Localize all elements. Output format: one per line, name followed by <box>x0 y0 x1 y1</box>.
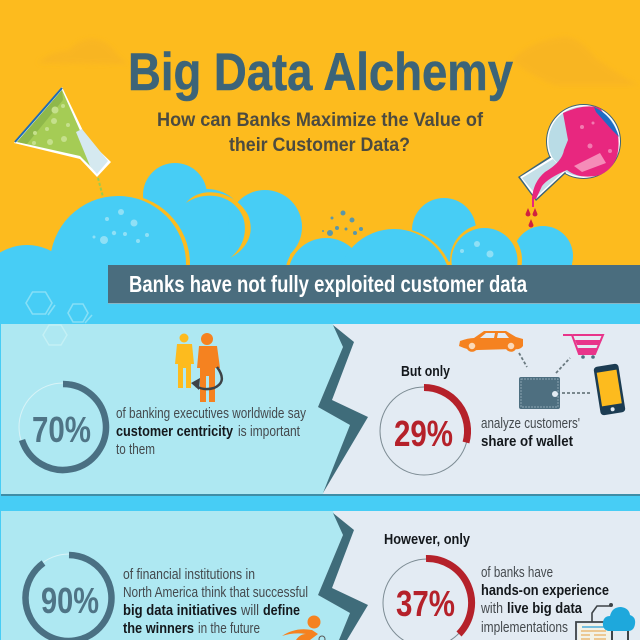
banner <box>108 265 640 304</box>
text: 37% description <box>480 564 609 636</box>
subtitle: How can Banks Maximize the Value of <box>157 110 484 131</box>
text: 90% description <box>123 566 308 637</box>
icon: pink flask <box>518 104 621 228</box>
bubbles on clouds <box>92 209 494 258</box>
ring: 70% <box>19 383 107 471</box>
ring: 29% <box>380 387 468 475</box>
panel: row 1 <box>1 324 640 496</box>
heading: but only: But only <box>401 364 450 380</box>
text: 90% description: define <box>263 603 300 619</box>
text: 70% description: is important <box>238 423 301 440</box>
text: 90% description: will <box>240 602 259 619</box>
ring: 37%: 37% <box>396 583 455 624</box>
text: 90% description: of financial institutions in <box>123 566 255 583</box>
icon: cloud and server <box>576 603 635 640</box>
zigzag divider <box>318 325 368 493</box>
icon: runner <box>282 616 325 640</box>
text: 37% description: with <box>480 600 503 617</box>
text: 70% description: to them <box>116 441 155 458</box>
icon: green flask <box>14 87 111 197</box>
text: 37% description: implementations <box>481 619 568 636</box>
icon: two people <box>175 333 222 402</box>
panel: row 2 <box>1 511 640 640</box>
text: 90% description: in the future <box>198 620 260 637</box>
icon: wallet <box>519 377 560 409</box>
ring: 37% <box>383 558 472 640</box>
icon: cart <box>563 335 603 359</box>
text: 29% description: share of wallet <box>481 434 573 450</box>
text: 37% description: hands-on experience <box>481 583 609 599</box>
faint background clouds <box>38 37 638 85</box>
banner: Banks have not fully exploited customer data <box>129 271 527 297</box>
text: 37% description: of banks have <box>481 564 553 581</box>
icon: car <box>459 331 523 350</box>
subtitle: their Customer Data? <box>229 135 410 156</box>
hexagon <box>43 325 67 345</box>
ring: 29%: 29% <box>394 413 453 454</box>
text: 90% description: North America think that successful <box>123 584 308 601</box>
text: 90% description: big data initiatives <box>123 603 237 619</box>
ring: 90%: 90% <box>41 580 99 621</box>
subtitle <box>157 110 484 156</box>
text: 70% description: customer centricity <box>116 424 233 440</box>
text: 29% description: analyze customers' <box>481 415 580 432</box>
ring: 90% <box>25 554 113 640</box>
ring: 70%: 70% <box>32 409 91 450</box>
text: 29% description <box>481 415 580 450</box>
text: 37% description: live big data <box>507 601 583 617</box>
heading: however only: However, only <box>384 532 470 548</box>
icon: phone <box>593 363 626 416</box>
zigzag divider <box>318 513 368 640</box>
title: Big Data Alchemy <box>128 43 513 102</box>
text: 90% description: the winners <box>123 621 194 637</box>
blue clouds <box>0 163 640 349</box>
text: 70% description <box>116 405 306 458</box>
decorative hexagons <box>26 292 92 323</box>
dots above clouds <box>322 210 363 236</box>
dashed connectors <box>519 353 592 393</box>
text: 70% description: of banking executives worldwide say <box>116 405 306 422</box>
